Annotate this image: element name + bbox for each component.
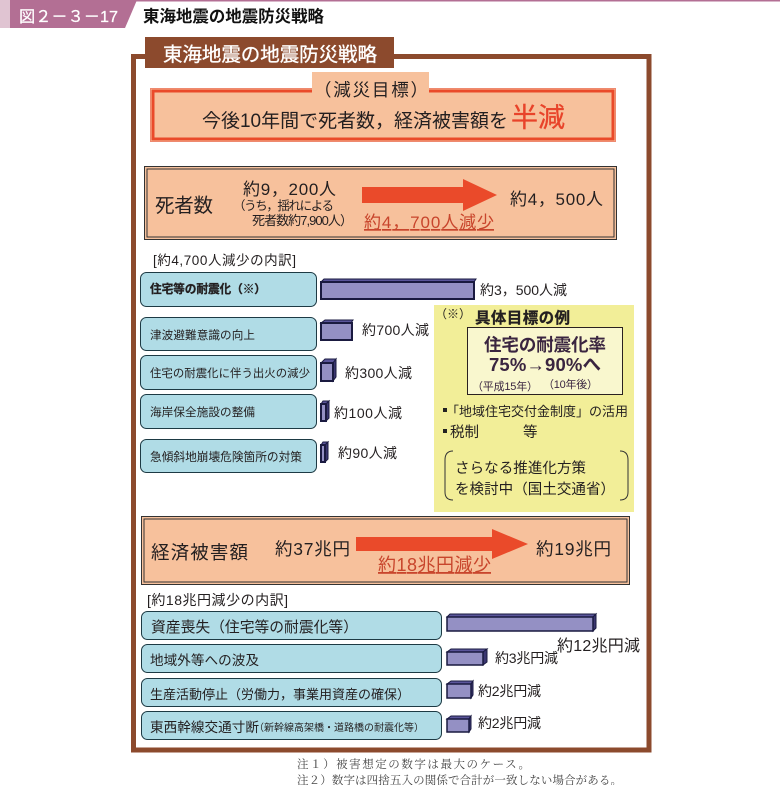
footnotes — [297, 757, 622, 785]
row: coastal facilities: 海岸保全施設の整備 — [150, 405, 255, 419]
panel: specific target example: 税制 — [450, 424, 479, 441]
figure header band — [0, 0, 780, 28]
panel: mitigation goal: 今後10年間で死者数，経済被害額を — [202, 110, 508, 132]
row: tsunami awareness: 約700人減 — [362, 322, 429, 338]
panel: specific target example — [434, 305, 634, 512]
row: spillover: 地域外等への波及 — [150, 652, 259, 668]
row: steep slope — [140, 440, 397, 472]
panel: specific target example: （平成15年） — [472, 379, 538, 393]
row: tsunami awareness — [140, 318, 429, 350]
row: transport cut — [142, 712, 541, 740]
row: transport cut: 約2兆円減 — [478, 715, 541, 731]
panel: specific target example: （※） — [435, 307, 471, 321]
panel: economic damage: 約18兆円減少 — [378, 555, 491, 575]
row: spillover: 約3兆円減 — [495, 650, 558, 666]
panel: mitigation goal: 半減 — [511, 103, 565, 133]
heading: economic breakdown: [約18兆円減少の内訳] — [147, 592, 288, 608]
row: housing seismic: 住宅等の耐震化（※） — [150, 282, 266, 296]
row: coastal facilities: 約100人減 — [334, 405, 402, 421]
panel: specific target example: 住宅の耐震化率 — [484, 335, 606, 355]
panel: specific target example: （10年後） — [543, 377, 598, 391]
row: tsunami awareness: 津波避難意識の向上 — [150, 328, 255, 342]
panel: deaths: （うち，揺れによる — [233, 199, 334, 213]
panel: deaths: 約4，700人減少 — [364, 213, 494, 232]
arrow: economic reduction — [356, 529, 528, 559]
row: asset loss: 約12兆円減 — [557, 637, 640, 655]
panel: economic damage: 経済被害額 — [151, 542, 248, 563]
row: housing seismic: 約3，500人減 — [480, 282, 567, 298]
figure title: 東海地震の地震防災戦略 — [143, 6, 324, 26]
panel: deaths: 死者数 — [155, 195, 213, 217]
frame title tab — [145, 37, 394, 68]
panel: deaths: 約9，200人 — [243, 180, 336, 199]
row: housing seismic — [140, 272, 567, 306]
row: fire reduction: 住宅の耐震化に伴う出火の減少 — [150, 366, 310, 380]
row: transport cut: 東西幹線交通寸断 — [150, 720, 259, 735]
row: transport cut: （新幹線高架橋・道路橋の耐震化等） — [254, 721, 424, 734]
row: fire reduction: 約300人減 — [345, 365, 412, 381]
panel: specific target example: 等 — [523, 423, 538, 441]
figure header band: 図２－３－17 — [19, 9, 118, 26]
panel: economic damage: 約19兆円 — [536, 539, 611, 559]
row: steep slope: 急傾斜地崩壊危険箇所の対策 — [150, 450, 302, 464]
panel: specific target example: 75%→90%へ — [489, 354, 601, 375]
panel: deaths: 死者数約7,900人） — [252, 213, 353, 228]
footnotes: 注１）被害想定の数字は最大のケース。 — [297, 757, 530, 771]
row: asset loss — [142, 612, 640, 655]
panel: specific target example: 「地域住宅交付金制度」の活用 — [446, 404, 628, 419]
row: production halt — [142, 678, 541, 706]
frame title tab: 東海地震の地震防災戦略 — [163, 44, 377, 66]
panel: specific target example: を検討中（国土交通省） — [455, 481, 615, 498]
row: fire reduction — [140, 356, 412, 390]
panel: economic damage — [142, 516, 630, 584]
row: steep slope: 約90人減 — [338, 445, 397, 461]
row: coastal facilities — [140, 394, 402, 428]
row: production halt: 約2兆円減 — [478, 683, 541, 699]
panel: specific target example: さらなる推進化方策 — [455, 460, 586, 477]
row: asset loss: 資産喪失（住宅等の耐震化等） — [151, 618, 358, 636]
arrow: deaths reduction — [362, 179, 497, 211]
row: spillover — [142, 644, 558, 672]
panel: specific target example: 具体目標の例 — [475, 308, 570, 327]
row: production halt: 生産活動停止（労働力，事業用資産の確保） — [150, 687, 410, 702]
panel: deaths — [144, 166, 616, 240]
panel: mitigation goal — [150, 72, 616, 142]
heading: deaths breakdown: [約4,700人減少の内訳] — [153, 252, 296, 268]
panel: deaths: 約4，500人 — [510, 190, 603, 209]
main frame — [134, 56, 649, 750]
panel: economic damage: 約37兆円 — [275, 539, 350, 559]
panel: mitigation goal: （減災目標） — [314, 80, 428, 100]
